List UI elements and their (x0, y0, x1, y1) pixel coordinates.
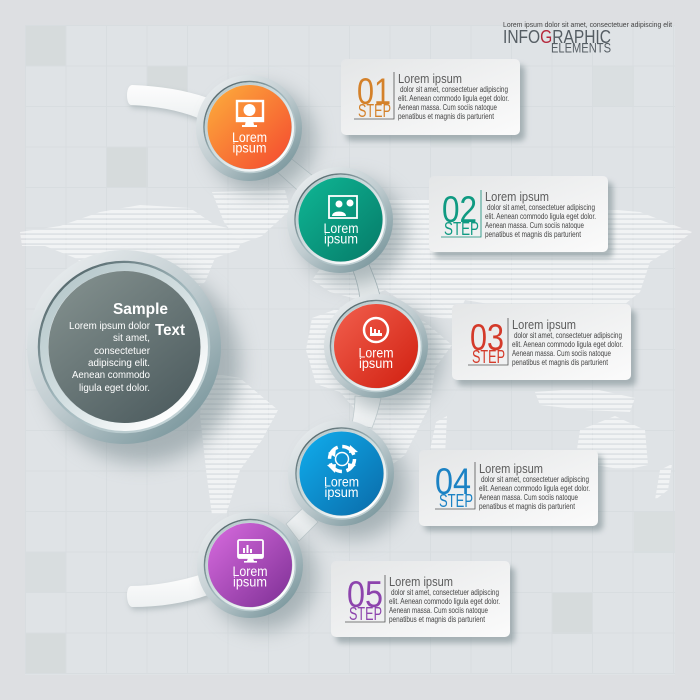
number: 04 (435, 461, 471, 502)
title block: ELEMENTS (551, 40, 611, 56)
number: 01 (357, 71, 391, 112)
icon: cycle arrows (327, 445, 358, 473)
axis (441, 190, 481, 237)
body text: dolor sit amet, consectetuer adipiscing (400, 85, 508, 94)
step label: STEP (472, 347, 505, 367)
label: Lorem (232, 130, 267, 145)
step label: STEP (349, 604, 382, 624)
axis (345, 575, 385, 622)
label: Lorem (358, 346, 394, 360)
card: step 02 (429, 176, 613, 258)
title: Lorem ipsum (479, 461, 543, 476)
body text (485, 203, 596, 239)
connector: bottom ribbon (127, 574, 210, 610)
number: 03 (470, 317, 504, 358)
title block: Lorem ipsum dolor sit amet, consectetuer adipiscing elit (503, 20, 673, 29)
step 5 circle: ipsum (233, 574, 267, 590)
body text: Aenean massa. Cum sociis natoque (485, 221, 584, 230)
body text: dolor sit amet, consectetuer adipiscing (514, 331, 622, 340)
body text (512, 331, 623, 367)
step label: STEP (444, 219, 479, 239)
axis (354, 72, 394, 119)
connector: steps 3 to 4 (352, 396, 381, 428)
title: Lorem ipsum (389, 574, 453, 589)
body text: Aenean massa. Cum sociis natoque (512, 349, 611, 358)
body text: penatibus et magnis dis parturient (479, 502, 576, 511)
label: Lorem (324, 474, 359, 490)
title: Lorem ipsum (398, 71, 462, 86)
body text: Aenean massa. Cum sociis natoque (398, 103, 497, 112)
body text (398, 85, 509, 121)
number: 05 (347, 574, 383, 615)
body text: Lorem ipsum dolor (69, 320, 150, 332)
body text: elit. Aenean commodo ligula eget dolor. (512, 340, 623, 349)
body text: consectetuer (94, 345, 150, 357)
body text: Aenean commodo (72, 369, 150, 381)
body text: penatibus et magnis dis parturient (389, 615, 486, 624)
connector: steps 4 to 5 (286, 508, 318, 541)
label: Lorem (232, 564, 268, 579)
body text: penatibus et magnis dis parturient (512, 358, 609, 367)
icon: monitor with pie (236, 101, 264, 127)
icon: gauge with bars (364, 318, 388, 342)
body text: ligula eget dolor. (79, 382, 150, 394)
step 3 circle: ipsum (359, 356, 393, 371)
body text: elit. Aenean commodo ligula eget dolor. (479, 484, 590, 493)
connector: steps 1 to 2 (275, 156, 318, 196)
body text: elit. Aenean commodo ligula eget dolor. (485, 212, 596, 221)
step 2 circle: ipsum (324, 232, 358, 246)
body text: Aenean massa. Cum sociis natoque (389, 606, 488, 615)
axis (435, 462, 475, 509)
card: step 03 (452, 304, 636, 386)
title: Lorem ipsum (512, 317, 576, 332)
body text: dolor sit amet, consectetuer adipiscing (391, 588, 499, 597)
body text: elit. Aenean commodo ligula eget dolor. (398, 94, 509, 103)
body text (479, 475, 590, 511)
step 5 circle (197, 512, 316, 630)
body text: dolor sit amet, consectetuer adipiscing (487, 203, 595, 212)
heading: text: Text (155, 322, 185, 339)
label: Lorem (324, 221, 358, 236)
step label: STEP (439, 491, 473, 511)
icon: monitor with bars (238, 540, 263, 563)
step label: STEP (358, 101, 391, 121)
step 1 circle: ipsum (232, 140, 266, 156)
body text: Aenean massa. Cum sociis natoque (479, 493, 578, 502)
number: 02 (442, 189, 477, 230)
connector: steps 2 to 3 (352, 262, 381, 300)
body text: adipiscing elit. (88, 357, 150, 369)
body text: elit. Aenean commodo ligula eget dolor. (389, 597, 500, 606)
body text: penatibus et magnis dis parturient (398, 112, 495, 121)
icon: presentation board (329, 196, 357, 218)
step 4 circle: ipsum (324, 485, 358, 500)
card: step 01 (341, 59, 525, 141)
step 1 circle (196, 75, 315, 193)
body text (69, 320, 150, 394)
body text: dolor sit amet, consectetuer adipiscing (481, 475, 589, 484)
step 2 circle (287, 167, 406, 285)
card: step 04 (419, 450, 603, 531)
body text: sit amet, (113, 332, 150, 344)
connector: top ribbon (127, 85, 210, 121)
body text (389, 588, 500, 624)
axis (468, 318, 508, 365)
world map (20, 190, 692, 515)
body text: penatibus et magnis dis parturient (485, 230, 582, 239)
step 3 circle (324, 294, 442, 411)
step 4 circle (288, 420, 407, 539)
card: step 05 (331, 561, 515, 643)
heading: sample: Sample (113, 301, 168, 318)
panel: sample text circle (27, 250, 240, 463)
title block (503, 20, 673, 56)
title: Lorem ipsum (485, 189, 549, 204)
title block: INFOGRAPHIC (503, 27, 611, 47)
